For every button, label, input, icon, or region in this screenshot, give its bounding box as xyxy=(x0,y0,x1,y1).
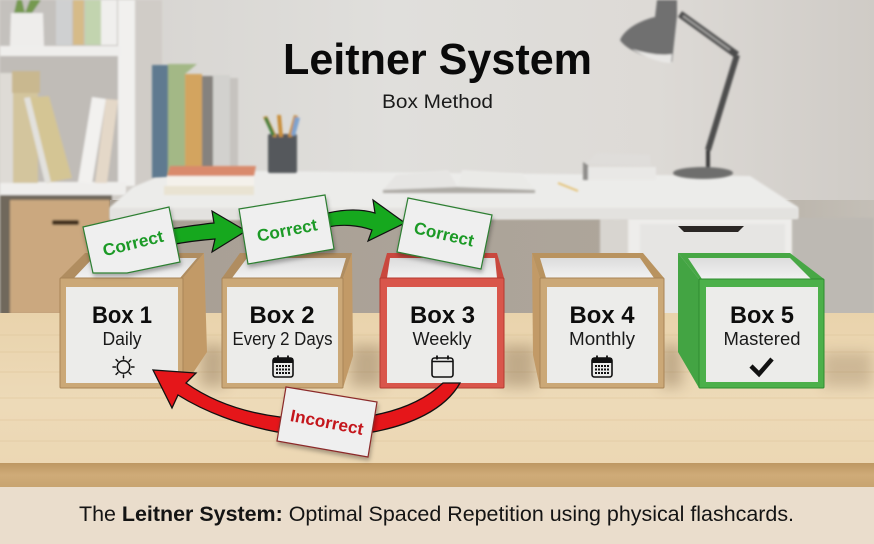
card: correct 3: Correct xyxy=(412,218,476,251)
box 5 schedule: Mastered xyxy=(724,329,800,349)
arrow: box 2 to box 3 xyxy=(328,200,405,241)
box 5 xyxy=(678,253,824,388)
card: incorrect xyxy=(277,387,377,457)
box 1 xyxy=(60,253,207,388)
caption text: The Leitner System: Optimal Spaced Repetition using physical flashcards. xyxy=(79,503,794,526)
icon: check mark xyxy=(751,359,772,374)
background: standing books xyxy=(152,64,238,178)
box 2 label: Box 2 xyxy=(250,302,314,329)
subtitle: Box Method xyxy=(382,92,493,113)
background: desk lamp xyxy=(620,0,737,179)
box 1 schedule: Daily xyxy=(102,329,142,349)
icon: calendar grid xyxy=(592,356,612,377)
box shadows on table xyxy=(200,345,872,387)
box 3 schedule: Weekly xyxy=(412,329,472,349)
card: correct 1 xyxy=(83,207,180,273)
background: desk items xyxy=(164,115,656,195)
box 4 xyxy=(532,253,664,388)
caption bar xyxy=(0,487,874,544)
icon: calendar grid xyxy=(273,356,293,377)
card: correct 1: Correct xyxy=(101,227,166,260)
title: Leitner System xyxy=(283,35,592,84)
card: correct 3 xyxy=(397,198,492,269)
card: correct 2 xyxy=(239,195,334,264)
background: table xyxy=(0,313,874,487)
box 1 label: Box 1 xyxy=(92,302,152,329)
arrow: box 1 to box 2 xyxy=(170,211,246,252)
icon: sun xyxy=(113,356,134,378)
box 5 label: Box 5 xyxy=(730,302,794,329)
box 4 schedule: Monthly xyxy=(569,329,635,349)
box 3 label: Box 3 xyxy=(410,302,475,329)
background: bookshelf xyxy=(0,0,162,315)
box 3 xyxy=(380,253,504,388)
box 2 xyxy=(222,253,353,388)
background: wall xyxy=(0,0,874,320)
icon: calendar blank xyxy=(432,356,453,377)
box 2 schedule: Every 2 Days xyxy=(232,329,332,349)
background: desk xyxy=(110,171,874,320)
card: incorrect: Incorrect xyxy=(289,406,365,439)
arrow: box 3 to box 1 xyxy=(153,370,460,432)
box 4 label: Box 4 xyxy=(570,302,635,329)
card: correct 2: Correct xyxy=(255,215,319,246)
